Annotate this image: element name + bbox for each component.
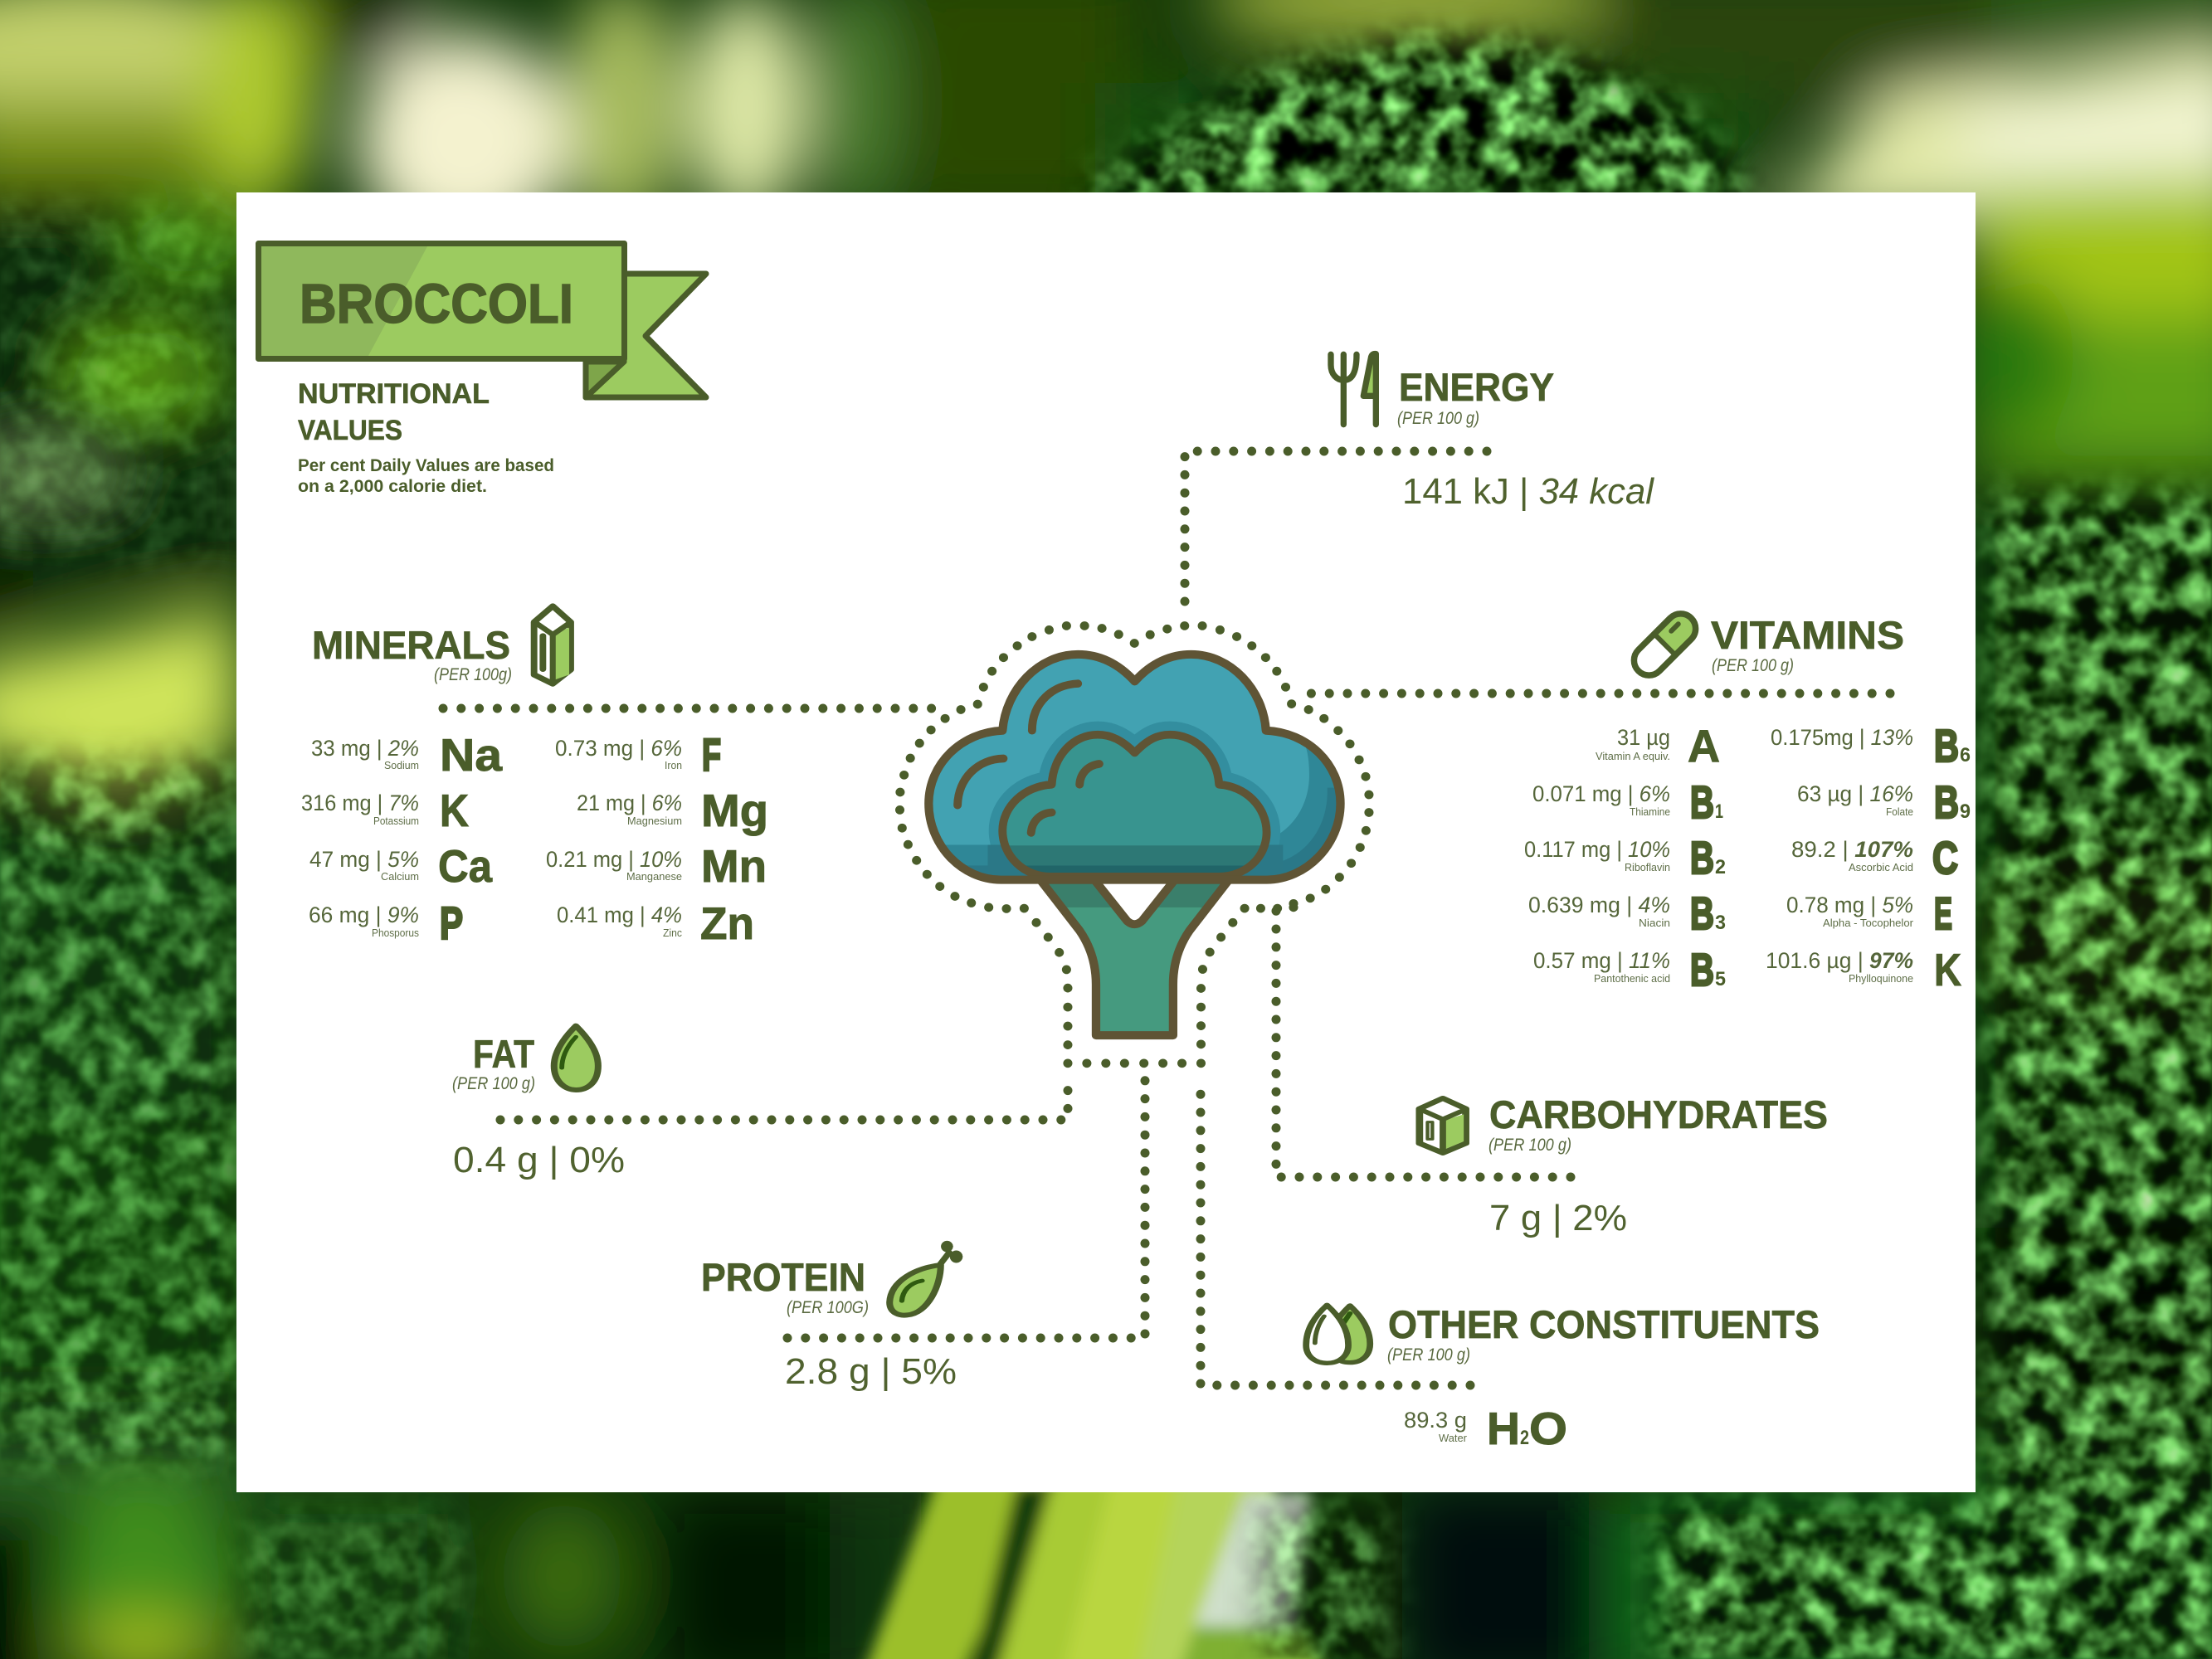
vitamin rows: B xyxy=(1934,776,1959,828)
section: carbohydrates: CARBOHYDRATES xyxy=(1489,1092,1828,1136)
vitamin rows: 0.57 mg | 11% xyxy=(1533,948,1670,973)
mineral rows: Mg xyxy=(701,785,768,836)
section: energy xyxy=(1331,354,1654,512)
mineral rows: Sodium xyxy=(384,759,419,771)
vitamin rows: Ascorbic Acid xyxy=(1849,861,1913,873)
vitamin rows: 3 xyxy=(1715,912,1726,934)
section: energy: 141 kJ | 34 kcal xyxy=(1402,471,1654,512)
mineral rows: K xyxy=(440,785,469,836)
icon: water drops xyxy=(1306,1305,1370,1363)
water value: H xyxy=(1487,1403,1520,1454)
vitamin rows xyxy=(1524,720,1971,995)
mineral rows: Mn xyxy=(701,840,767,892)
icon: crystal xyxy=(534,606,571,684)
vitamin rows: Folate xyxy=(1886,805,1913,818)
vitamin rows: 31 µg xyxy=(1617,725,1670,750)
section: fat: 0.4 g | 0% xyxy=(453,1140,625,1180)
mineral rows: Zn xyxy=(700,898,754,949)
section: fat: FAT xyxy=(473,1032,534,1076)
mineral rows xyxy=(301,729,768,949)
icon: fork and knife xyxy=(1331,354,1376,425)
mineral rows: 0.73 mg | 6% xyxy=(555,736,682,761)
note: daily values basis: Per cent Daily Values are based xyxy=(298,456,554,475)
icon: capsule xyxy=(1628,607,1702,682)
vitamin rows: B xyxy=(1690,888,1714,939)
section: carbohydrates: 7 g | 2% xyxy=(1489,1198,1627,1238)
vitamin rows: 63 µg | 16% xyxy=(1797,781,1913,806)
vitamin rows: K xyxy=(1934,944,1961,995)
mineral rows: Potassium xyxy=(373,815,419,827)
section: protein: PROTEIN xyxy=(701,1255,865,1299)
mineral rows: Manganese xyxy=(626,870,682,883)
section: carbohydrates: (PER 100 g) xyxy=(1488,1136,1571,1155)
vitamin rows: E xyxy=(1934,888,1952,939)
vitamin rows: Alpha - Tocophelor xyxy=(1823,917,1914,929)
mineral rows: 66 mg | 9% xyxy=(309,902,419,927)
icon: sugar cube xyxy=(1420,1098,1466,1153)
section: fat: (PER 100 g) xyxy=(452,1074,535,1093)
vitamin rows: 0.117 mg | 10% xyxy=(1524,837,1670,862)
water value: O xyxy=(1529,1403,1567,1454)
mineral rows: P xyxy=(440,898,463,949)
mineral rows: Magnesium xyxy=(627,815,682,827)
section: other constituents: (PER 100 g) xyxy=(1387,1345,1470,1365)
vitamin rows: Vitamin A equiv. xyxy=(1596,750,1670,762)
note: daily values basis xyxy=(298,456,554,496)
central broccoli illustration xyxy=(922,654,1345,1035)
title ribbon: BROCCOLI xyxy=(259,244,706,397)
vitamin rows: 0.175mg | 13% xyxy=(1771,725,1913,750)
vitamin rows: A xyxy=(1688,720,1720,771)
mineral rows: Iron xyxy=(665,759,682,771)
vitamin rows: C xyxy=(1932,832,1958,883)
vitamin rows: 2 xyxy=(1715,856,1726,878)
section: protein: (PER 100G) xyxy=(787,1298,869,1317)
icon: chicken drumstick xyxy=(889,1241,962,1316)
dotted connector lines xyxy=(443,451,1890,1385)
mineral rows: 47 mg | 5% xyxy=(309,847,419,872)
vitamin rows: Phylloquinone xyxy=(1849,972,1913,985)
mineral rows: Na xyxy=(440,729,502,781)
water value xyxy=(1404,1403,1567,1454)
water value: 89.3 g xyxy=(1404,1408,1467,1433)
mineral rows: F xyxy=(702,729,721,781)
water value: Water xyxy=(1439,1432,1468,1444)
mineral rows: 0.21 mg | 10% xyxy=(546,847,682,872)
vitamin rows: Thiamine xyxy=(1630,805,1670,818)
mineral rows: 316 mg | 7% xyxy=(301,791,419,815)
mineral rows: Phosporus xyxy=(372,927,419,939)
vitamin rows: B xyxy=(1690,944,1714,995)
section: minerals: MINERALS xyxy=(312,623,510,667)
vitamin rows: B xyxy=(1690,776,1714,828)
mineral rows: Zinc xyxy=(663,927,682,939)
vitamin rows: B xyxy=(1690,832,1714,883)
section: vitamins: (PER 100 g) xyxy=(1712,656,1794,675)
bottom stems xyxy=(863,1477,1328,1659)
section: minerals: (PER 100g) xyxy=(434,665,512,684)
vitamin rows: 0.78 mg | 5% xyxy=(1786,893,1913,917)
vitamin rows: 0.071 mg | 6% xyxy=(1532,781,1670,806)
section: energy: ENERGY xyxy=(1399,365,1554,409)
subtitle: nutritional values: VALUES xyxy=(298,415,402,446)
section: fat xyxy=(452,1026,625,1180)
vitamin rows: Pantothenic acid xyxy=(1594,972,1670,985)
vitamin rows: 89.2 | 107% xyxy=(1791,837,1913,862)
white content panel xyxy=(236,192,1976,1492)
mineral rows: Ca xyxy=(438,840,492,892)
note: daily values basis: on a 2,000 calorie diet. xyxy=(298,477,487,496)
vitamin rows: 101.6 µg | 97% xyxy=(1766,948,1913,973)
mineral rows: Calcium xyxy=(381,870,419,883)
section: protein xyxy=(701,1241,962,1392)
section: minerals xyxy=(301,606,768,949)
vitamin rows: 9 xyxy=(1960,800,1971,823)
mineral rows: 33 mg | 2% xyxy=(311,736,419,761)
vitamin rows: 0.639 mg | 4% xyxy=(1528,893,1670,917)
title ribbon: BROCCOLI: BROCCOLI xyxy=(300,273,573,335)
subtitle: nutritional values xyxy=(298,378,490,446)
vitamin rows: Riboflavin xyxy=(1625,861,1670,873)
vitamin rows: 1 xyxy=(1715,800,1723,823)
vitamin rows: B xyxy=(1934,720,1959,771)
water value: 2 xyxy=(1520,1427,1529,1449)
section: vitamins xyxy=(1524,607,1971,995)
mineral rows: 0.41 mg | 4% xyxy=(557,902,682,927)
mineral rows: 21 mg | 6% xyxy=(577,791,682,815)
section: other constituents xyxy=(1306,1302,1820,1454)
vitamin rows: 6 xyxy=(1960,744,1971,766)
section: other constituents: OTHER CONSTITUENTS xyxy=(1388,1302,1820,1346)
icon: oil drop xyxy=(554,1026,598,1090)
section: protein: 2.8 g | 5% xyxy=(785,1351,957,1392)
vitamin rows: 5 xyxy=(1715,968,1726,990)
vitamin rows: Niacin xyxy=(1639,917,1670,929)
section: energy: (PER 100 g) xyxy=(1397,409,1479,428)
subtitle: nutritional values: NUTRITIONAL xyxy=(298,378,490,410)
section: vitamins: VITAMINS xyxy=(1711,613,1904,657)
section: carbohydrates xyxy=(1420,1092,1828,1238)
dotted outline around broccoli xyxy=(900,625,1369,1063)
